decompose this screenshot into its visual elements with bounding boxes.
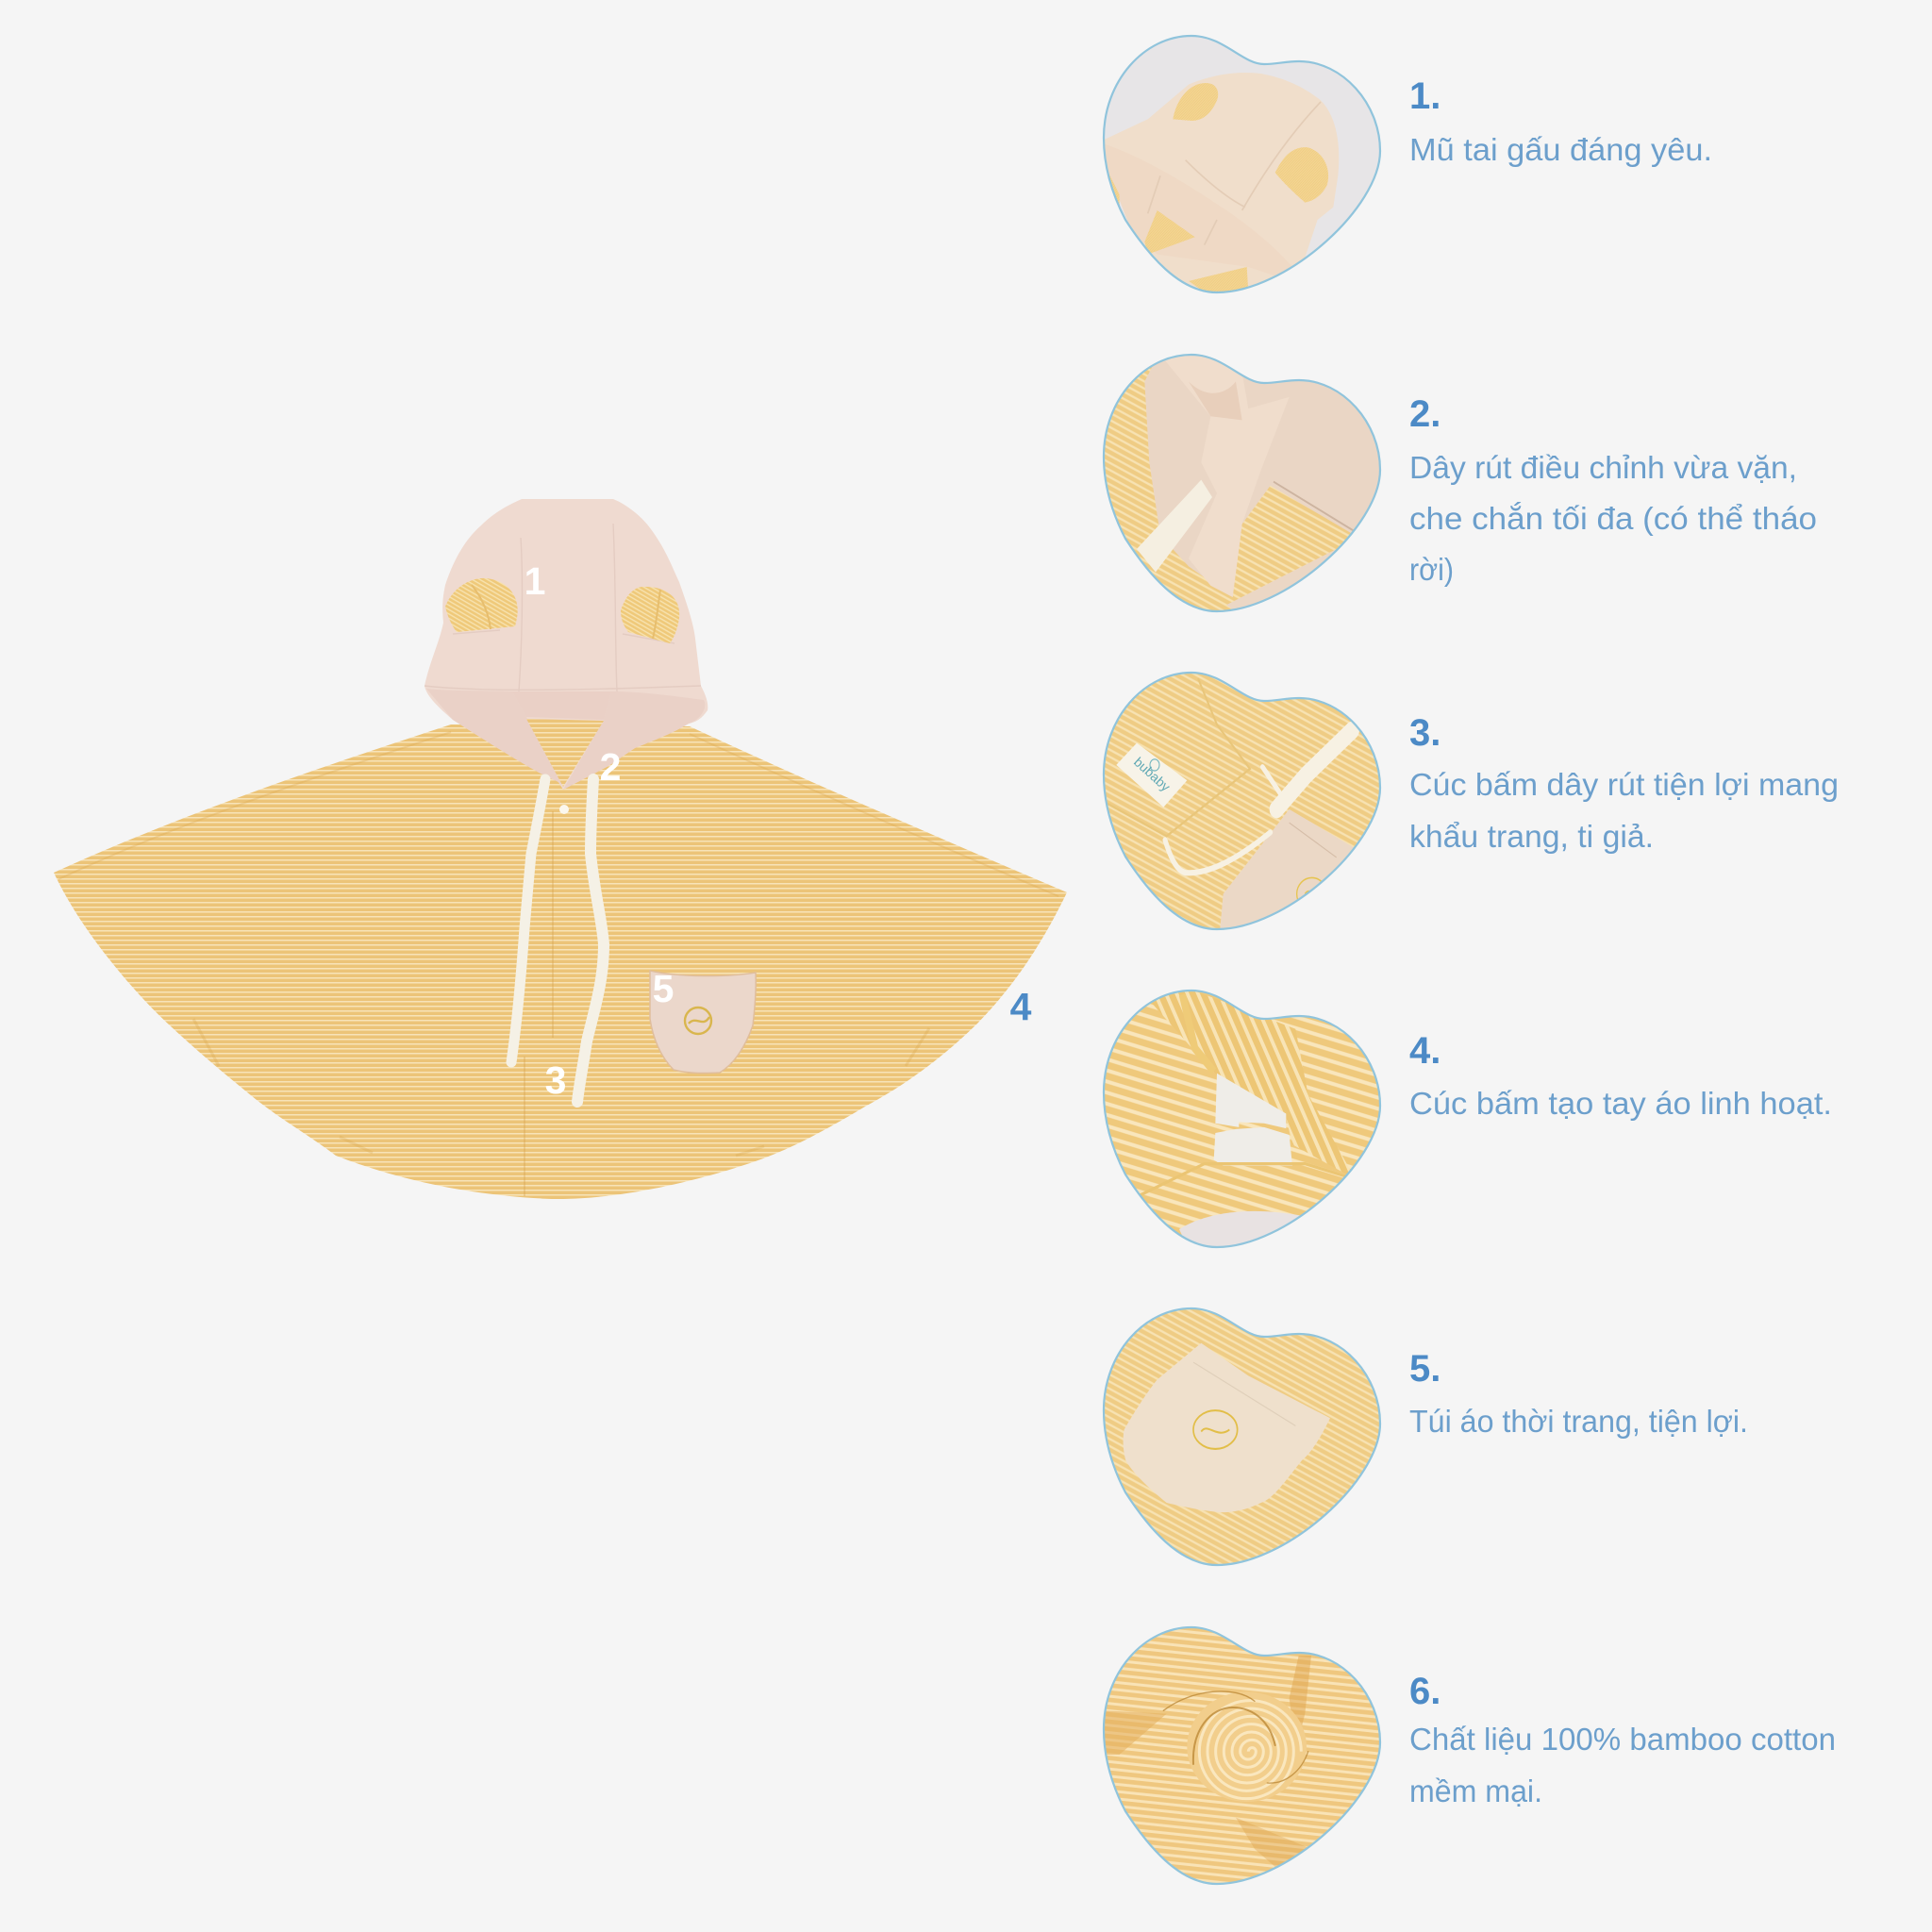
hood <box>425 499 708 790</box>
drawstrings <box>511 779 604 1102</box>
feature 5: pocket <box>1102 1307 1745 1566</box>
heading 4: 4. <box>1409 1030 1441 1072</box>
heart photo: sleeve tab <box>1102 989 1381 1249</box>
heading 5: 5. <box>1409 1348 1441 1390</box>
callout number 3: 3 <box>545 1058 566 1102</box>
description 1: Mũ tai gấu đáng yêu. <box>1409 132 1712 167</box>
description 2: che chắn tối đa (có thể tháo <box>1409 501 1817 536</box>
description 2 <box>1409 450 1817 587</box>
description 2: rời) <box>1409 552 1454 587</box>
feature 4: sleeve snap <box>1102 989 1829 1249</box>
heading 2: 2. <box>1409 393 1441 435</box>
description 3 <box>1409 767 1839 854</box>
callout number 2: 2 <box>600 745 621 789</box>
feature 1: hood with bear ears <box>1097 31 1712 305</box>
heart photo: hood <box>1097 31 1391 305</box>
heading 3: 3. <box>1409 712 1441 754</box>
heart photo: fabric swirl <box>1102 1626 1381 1885</box>
fabric swirl <box>1187 1691 1307 1802</box>
feature 2: drawstring <box>1102 353 1815 613</box>
description 3: khẩu trang, ti giả. <box>1409 819 1654 854</box>
feature 6: fabric <box>1102 1626 1834 1885</box>
heading 6: 6. <box>1409 1671 1441 1712</box>
hood inner back band <box>512 691 611 720</box>
cape body <box>54 724 1067 1199</box>
yellow neckline <box>526 719 604 787</box>
heart photo: drawstring detail <box>1102 353 1381 613</box>
feature 3: snap loop <box>1102 672 1837 930</box>
description 6: mềm mại. <box>1409 1774 1542 1808</box>
description 3: Cúc bấm dây rút tiện lợi mang <box>1409 767 1839 802</box>
description 2: Dây rút điều chỉnh vừa vặn, <box>1409 450 1797 485</box>
pocket <box>650 971 756 1074</box>
description 6 <box>1409 1722 1836 1808</box>
label brand text: bubaby <box>1131 754 1174 794</box>
heading 1: 1. <box>1409 75 1441 117</box>
snap button <box>559 805 569 814</box>
callout number 4: 4 <box>1010 985 1032 1028</box>
hood lining <box>426 689 705 790</box>
pocket logo <box>685 1008 711 1034</box>
heart photo: snap loop with label <box>1102 672 1381 930</box>
heart photo: pocket <box>1102 1307 1381 1566</box>
product photo: yellow hooded cape <box>54 499 1067 1199</box>
ear left <box>445 578 518 632</box>
ear right <box>621 587 679 643</box>
callout number 1: 1 <box>525 559 545 603</box>
description 5: Túi áo thời trang, tiện lợi. <box>1409 1404 1748 1439</box>
description 4: Cúc bấm tạo tay áo linh hoạt. <box>1409 1086 1832 1121</box>
description 6: Chất liệu 100% bamboo cotton <box>1409 1722 1836 1757</box>
callout number 5: 5 <box>653 967 674 1010</box>
